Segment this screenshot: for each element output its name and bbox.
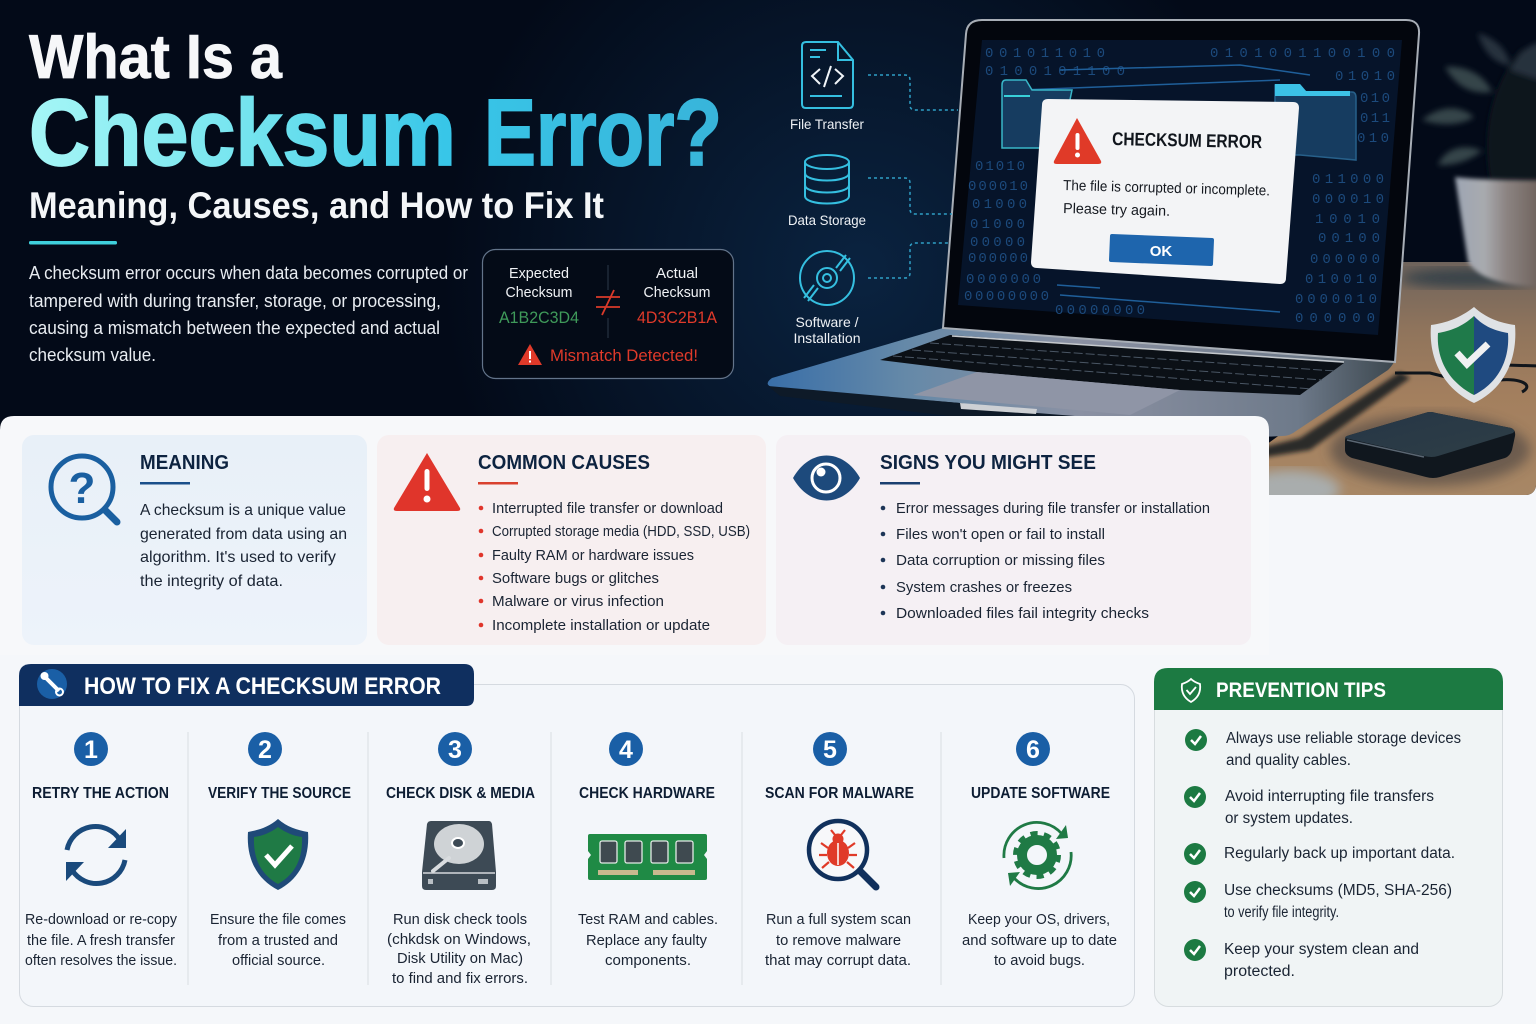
intro paragraph: causing a mismatch between the expected and actual (29, 318, 440, 338)
body text: algorithm. It's used to verify (140, 549, 336, 566)
title: UPDATE SOFTWARE (971, 785, 1110, 802)
number: 4 (619, 736, 633, 764)
keyboard (880, 335, 1344, 395)
intro paragraph (29, 263, 468, 365)
number (609, 732, 643, 766)
binary rows: 010 (1357, 131, 1389, 147)
dialog message: The file is corrupted or incomplete. (1063, 178, 1270, 199)
tip 2: or system updates. (1225, 810, 1353, 827)
number (248, 732, 282, 766)
laptop shadow (1260, 372, 1410, 458)
description: Keep your OS, drivers, (968, 912, 1110, 928)
actual checksum (637, 267, 717, 323)
external drive (1345, 412, 1515, 478)
screen lid (943, 20, 1419, 362)
step 2 (208, 732, 351, 969)
trackpad (913, 372, 1180, 415)
icon: wrench (37, 669, 67, 699)
table surface (1269, 262, 1536, 495)
hero background (0, 0, 1536, 530)
dialog message: Please try again. (1063, 201, 1170, 220)
tip 4: Use checksums (MD5, SHA-256) (1224, 882, 1452, 899)
causes list: Corrupted storage media (HDD, SSD, USB) (492, 523, 750, 540)
icon: bug magnifier (809, 821, 876, 887)
label: Data Storage (788, 212, 866, 228)
front notch (960, 403, 1037, 414)
tip 4: to verify file integrity. (1224, 904, 1339, 921)
binary rows: 01010 (975, 159, 1025, 175)
dialog heading: CHECKSUM ERROR (1112, 128, 1262, 152)
binary rows: 000000 (1295, 311, 1375, 327)
binary rows: 000000 (968, 251, 1028, 267)
title accent line (29, 241, 117, 244)
panel: prevention tips (1154, 668, 1503, 1006)
tip 5: Keep your system clean and (1224, 941, 1419, 958)
intro paragraph: tampered with during transfer, storage, or processing, (29, 291, 441, 311)
binary rows (964, 46, 1395, 327)
screen data lines (1020, 65, 1310, 312)
OK button: OK (1150, 243, 1172, 260)
description: (chkdsk on Windows, (387, 932, 531, 948)
number: 6 (1026, 736, 1040, 764)
causes list: Software bugs or glitches (492, 570, 659, 587)
icon: warning triangle (1054, 118, 1101, 164)
description: Replace any faulty (586, 933, 708, 949)
binary rows: 010010 (1305, 272, 1377, 288)
icon: hard disk (422, 821, 496, 890)
step 3 (386, 732, 535, 987)
panel: common causes (377, 435, 766, 645)
OK button (1109, 234, 1214, 266)
label: Software / (796, 314, 859, 330)
tip 2: Avoid interrupting file transfers (1225, 788, 1434, 805)
tip 3 (1184, 843, 1455, 865)
description: Test RAM and cables. (578, 912, 718, 928)
title line 1: What Is a (29, 23, 282, 92)
base front edge (768, 386, 1074, 416)
intro paragraph: checksum value. (29, 345, 156, 365)
tip 3: Regularly back up important data. (1224, 845, 1455, 862)
step 4 (578, 732, 718, 969)
connector lines (868, 75, 958, 278)
actual checksum: Checksum (644, 284, 710, 301)
binary rows: 011000 (1312, 172, 1384, 188)
label (794, 314, 860, 346)
description: components. (605, 953, 691, 969)
description: Run a full system scan (766, 912, 911, 928)
description: from a trusted and (218, 933, 338, 949)
title: RETRY THE ACTION (32, 785, 169, 802)
tip 1: Always use reliable storage devices (1226, 730, 1461, 747)
heading: MEANING (140, 452, 229, 474)
binary rows: 000000 (1310, 252, 1380, 268)
description (25, 912, 178, 969)
not equal sign (596, 290, 620, 315)
screen display (958, 40, 1402, 335)
icon: RAM module (588, 834, 707, 880)
laptop (768, 20, 1419, 458)
expected checksum (499, 265, 579, 327)
icon: shield outline (1182, 679, 1200, 702)
step 1 (25, 732, 178, 969)
fix heading: HOW TO FIX A CHECKSUM ERROR (84, 673, 441, 700)
number (438, 732, 472, 766)
description: to find and fix errors. (392, 971, 528, 987)
binary rows: 0000000 (966, 272, 1041, 288)
binary rows: 10010 (1315, 212, 1380, 228)
body text: the integrity of data. (140, 573, 283, 590)
causes list (479, 500, 750, 634)
binary rows: 00000 (970, 235, 1025, 251)
heading: COMMON CAUSES (478, 452, 650, 474)
panel: how to fix (19, 664, 1134, 1006)
tip 2 (1184, 786, 1434, 827)
description (962, 912, 1117, 969)
signs list: Data corruption or missing files (896, 552, 1105, 569)
tip 1: and quality cables. (1226, 752, 1351, 769)
actual checksum: 4D3C2B1A (637, 308, 718, 327)
panel: meaning (22, 435, 367, 645)
icon: database (805, 155, 849, 204)
causes list: Malware or virus infection (492, 593, 664, 610)
signs list: Error messages during file transfer or installation (896, 500, 1210, 517)
title: CHECK HARDWARE (579, 785, 715, 802)
laptop base (768, 328, 1394, 440)
description: that may corrupt data. (765, 953, 911, 969)
description: often resolves the issue. (25, 953, 177, 969)
underline (880, 482, 920, 484)
upper white panel (0, 416, 1269, 655)
label: File Transfer (790, 116, 864, 132)
icon: question magnifier (51, 456, 117, 522)
description: and software up to date (962, 933, 1117, 949)
binary rows: 0000010 (1295, 292, 1377, 308)
prevention header (1154, 668, 1503, 710)
prevention heading: PREVENTION TIPS (1216, 679, 1386, 702)
source: file transfer (790, 42, 864, 132)
number: 1 (84, 736, 98, 764)
title line 2 (32, 96, 718, 167)
description: the file. A fresh transfer (27, 933, 175, 949)
binary rows: 00000000 (964, 289, 1049, 305)
description: to remove malware (776, 933, 901, 949)
number (74, 732, 108, 766)
binary rows: 01010 (1335, 69, 1395, 85)
binary rows: 01000 (970, 217, 1025, 233)
description: Disk Utility on Mac) (397, 951, 523, 967)
body text: A checksum is a unique value (140, 502, 346, 519)
binary rows: 0100101100 (985, 64, 1125, 80)
source: data storage (788, 155, 866, 228)
expected checksum: Checksum (506, 284, 572, 301)
expected checksum: Expected (509, 265, 569, 282)
description (210, 912, 346, 969)
icon: disc (800, 251, 854, 305)
folder left (1002, 80, 1072, 148)
number: 5 (823, 736, 837, 764)
icon: code file (802, 42, 853, 108)
plant (1422, 33, 1536, 180)
signs list: System crashes or freezes (896, 579, 1072, 596)
error dialog (1031, 99, 1299, 284)
icon: question magnifier: ? (69, 464, 95, 513)
dialog panel (1031, 99, 1299, 284)
description: official source. (232, 953, 325, 969)
intro paragraph: A checksum error occurs when data becomes corrupted or (29, 263, 468, 283)
heading: SIGNS YOU MIGHT SEE (880, 452, 1096, 474)
title: VERIFY THE SOURCE (208, 785, 351, 802)
description: Run disk check tools (393, 912, 527, 928)
icon: gear update (1004, 822, 1071, 889)
mismatch box (482, 250, 734, 378)
binary rows: 010 (1360, 91, 1390, 107)
expected checksum: A1B2C3D4 (499, 308, 579, 327)
folder right (1275, 84, 1356, 160)
body text (140, 502, 347, 590)
underline (140, 482, 190, 484)
binary rows: 000010 (968, 179, 1028, 195)
title (29, 23, 722, 226)
description: Re-download or re-copy (25, 912, 178, 928)
dialog message (1063, 178, 1270, 220)
binary rows: 00100 (1318, 231, 1380, 247)
title: CHECK DISK & MEDIA (386, 785, 535, 802)
icon: eye (793, 456, 860, 500)
icon: warning (518, 344, 542, 365)
binary rows: 011 (1360, 111, 1390, 127)
tip 5: protected. (1224, 963, 1295, 980)
signs list (881, 500, 1210, 622)
binary rows: 001011010 (985, 46, 1105, 62)
icon: shield (248, 819, 308, 890)
step 5 (765, 732, 914, 969)
actual checksum: Actual (656, 265, 698, 282)
shield badge (1431, 307, 1515, 403)
signs list: Downloaded files fail integrity checks (896, 605, 1149, 622)
number (813, 732, 847, 766)
tip 5 (1184, 939, 1419, 980)
plant pot (1455, 177, 1536, 288)
title line 2: Error? (484, 80, 722, 186)
description: Ensure the file comes (210, 912, 346, 928)
icon: sync arrows (66, 826, 126, 884)
cable (1395, 365, 1536, 392)
causes list: Incomplete installation or update (492, 617, 710, 634)
fix header (19, 664, 474, 706)
description (578, 912, 718, 969)
body text: generated from data using an (140, 526, 347, 543)
title: SCAN FOR MALWARE (765, 785, 914, 802)
subtitle: Meaning, Causes, and How to Fix It (29, 185, 604, 226)
icon: warning triangle (394, 453, 460, 511)
number: 2 (258, 736, 272, 764)
description (387, 912, 531, 987)
hinge highlight (952, 336, 1344, 362)
step 6 (962, 732, 1117, 969)
source: software (794, 251, 860, 346)
binary rows: 01000 (972, 197, 1027, 213)
binary rows: 000010 (1312, 192, 1384, 208)
number (1016, 732, 1050, 766)
tip 1 (1185, 729, 1461, 769)
binary rows: 0101001100100 (1210, 46, 1395, 62)
title line 2: Checksum (29, 80, 456, 186)
underline (478, 482, 518, 484)
number: 3 (448, 736, 462, 764)
signs list: Files won't open or fail to install (896, 526, 1105, 543)
description (765, 912, 911, 969)
tip 4 (1184, 881, 1452, 921)
panel: signs you might see (776, 435, 1251, 645)
mismatch label: Mismatch Detected! (550, 346, 698, 365)
label: Installation (794, 330, 860, 346)
causes list: Faulty RAM or hardware issues (492, 547, 694, 564)
causes list: Interrupted file transfer or download (492, 500, 723, 517)
description: to avoid bugs. (994, 953, 1085, 969)
binary rows: 00000000 (1055, 303, 1145, 319)
